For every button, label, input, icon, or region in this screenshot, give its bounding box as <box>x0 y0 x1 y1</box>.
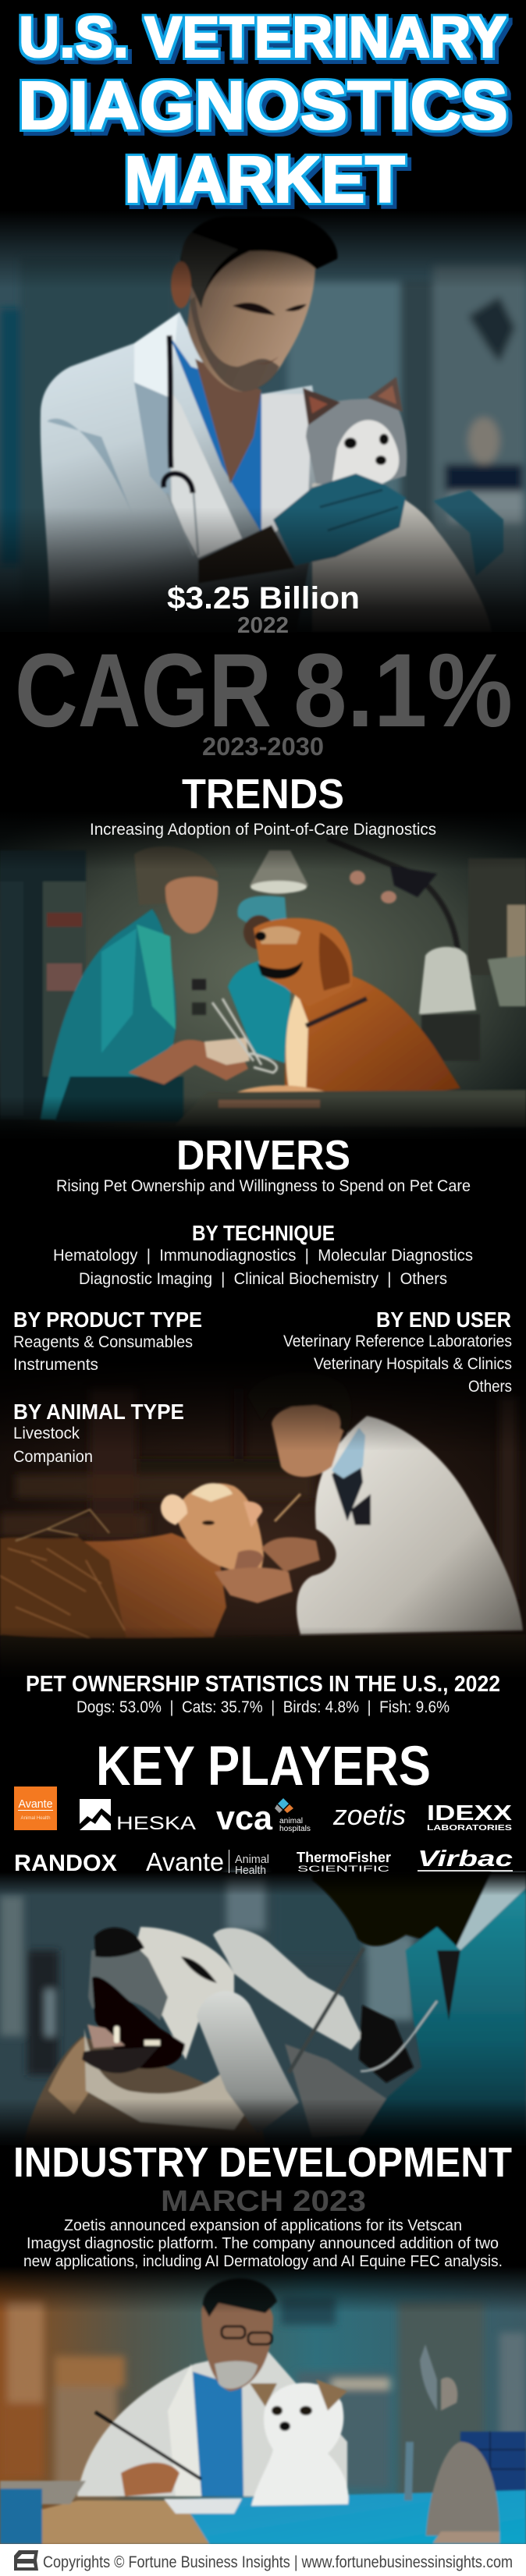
photo: vets with golden retriever <box>0 811 526 1143</box>
segment: by animal type <box>13 1400 184 1466</box>
drivers section: DRIVERS <box>176 1132 350 1179</box>
segment: by product type: Instruments <box>13 1356 98 1374</box>
photo: vet holding small dog <box>0 211 526 641</box>
logo: IDEXX Laboratories: IDEXX <box>427 1801 512 1825</box>
industry development description: Imagyst diagnostic platform. The company announced addition of two <box>27 2235 499 2252</box>
trends section: TRENDS <box>182 771 344 818</box>
segment: by end user: Veterinary Reference Laboratories <box>283 1332 512 1350</box>
logo: VCA animal hospitals <box>216 1798 311 1837</box>
icon: Fortune Business Insights logo <box>14 2550 38 2571</box>
logo: Randox: RANDOX <box>14 1850 117 1876</box>
title <box>18 5 508 216</box>
photo: vet with calf in barn <box>0 1357 526 1681</box>
logo: Avante Animal Health wordmark: Avante <box>146 1847 224 1876</box>
pet ownership statistics <box>26 1672 500 1716</box>
segment: by technique: Hematology | Immunodiagnostics | Molecular Diagnostics <box>53 1247 473 1265</box>
title: DIAGNOSTICS <box>18 68 508 144</box>
segment: by end user: Others <box>468 1378 512 1396</box>
trends section <box>90 771 436 839</box>
CAGR figure: CAGR <box>15 633 272 749</box>
market size: $3.25 Billion <box>167 581 360 616</box>
key players heading: KEY PLAYERS <box>96 1736 431 1797</box>
logo: Avante Animal Health wordmark: Health <box>235 1864 266 1877</box>
logo: Avante Animal Health wordmark: Animal <box>235 1853 269 1866</box>
title: MARKET <box>124 143 405 216</box>
industry development description: new applications, including AI Dermatology and AI Equine FEC analysis. <box>23 2253 503 2270</box>
logo: IDEXX Laboratories <box>427 1801 512 1833</box>
logo: Virbac: Virbac <box>418 1847 513 1872</box>
segment: by product type: Reagents & Consumables <box>13 1333 193 1351</box>
trends section: Increasing Adoption of Point-of-Care Diagnostics <box>90 821 436 839</box>
segment: by end user <box>283 1308 512 1396</box>
logo: VCA animal hospitals: hospitals <box>279 1825 311 1833</box>
industry development heading: MARCH 2023 <box>161 2185 366 2218</box>
logo: Avante Animal Health orange badge: Avante <box>19 1797 53 1811</box>
title: U.S. VETERINARY <box>19 5 506 69</box>
logo: VCA animal hospitals: vca <box>216 1799 273 1837</box>
segment: by animal type: Livestock <box>13 1425 80 1442</box>
logo: IDEXX Laboratories: LABORATORIES <box>427 1824 512 1833</box>
logo: Avante Animal Health orange badge: Animal Health <box>20 1816 50 1821</box>
industry development description: Zoetis announced expansion of applications for its Vetscan <box>64 2217 462 2234</box>
industry development heading <box>13 2139 512 2218</box>
industry development description <box>23 2217 503 2270</box>
logo: Thermo Fisher Scientific <box>297 1850 391 1874</box>
logo: Heska: HESKA <box>116 1813 196 1834</box>
segment: by technique: BY TECHNIQUE <box>192 1221 335 1245</box>
pet ownership statistics: Dogs: 53.0% | Cats: 35.7% | Birds: 4.8% | Fish: 9.6% <box>76 1698 450 1716</box>
footer bar <box>0 2544 526 2576</box>
segment: by product type: BY PRODUCT TYPE <box>13 1308 202 1332</box>
segment: by end user: BY END USER <box>376 1308 511 1332</box>
drivers section <box>56 1132 471 1195</box>
CAGR figure: 8.1% <box>293 633 513 749</box>
logo: Avante Animal Health wordmark <box>146 1847 269 1877</box>
segment: by end user: Veterinary Hospitals & Clinics <box>314 1355 512 1373</box>
segment: by animal type: BY ANIMAL TYPE <box>13 1400 184 1424</box>
CAGR figure: 2023-2030 <box>202 733 324 761</box>
photo: vet examining dog <box>0 1872 526 2150</box>
market size <box>167 581 360 638</box>
drivers section: Rising Pet Ownership and Willingness to Spend on Pet Care <box>56 1177 471 1195</box>
segment: by technique <box>53 1221 473 1288</box>
logo: Zoetis: zoetis <box>332 1799 406 1831</box>
logo: Heska <box>80 1799 196 1834</box>
segment: by technique: Diagnostic Imaging | Clinical Biochemistry | Others <box>79 1270 447 1288</box>
CAGR figure <box>15 633 513 761</box>
logo: VCA animal hospitals: animal <box>279 1817 303 1826</box>
segment: by product type <box>13 1308 202 1374</box>
logo: Thermo Fisher Scientific: SCIENTIFIC <box>297 1865 389 1874</box>
logo: Avante Animal Health orange badge <box>14 1787 57 1830</box>
segment: by animal type: Companion <box>13 1448 93 1466</box>
photo: vet with small dog at desk <box>0 2266 526 2544</box>
market size: 2022 <box>237 613 289 638</box>
logo: Thermo Fisher Scientific: ThermoFisher <box>297 1850 391 1865</box>
